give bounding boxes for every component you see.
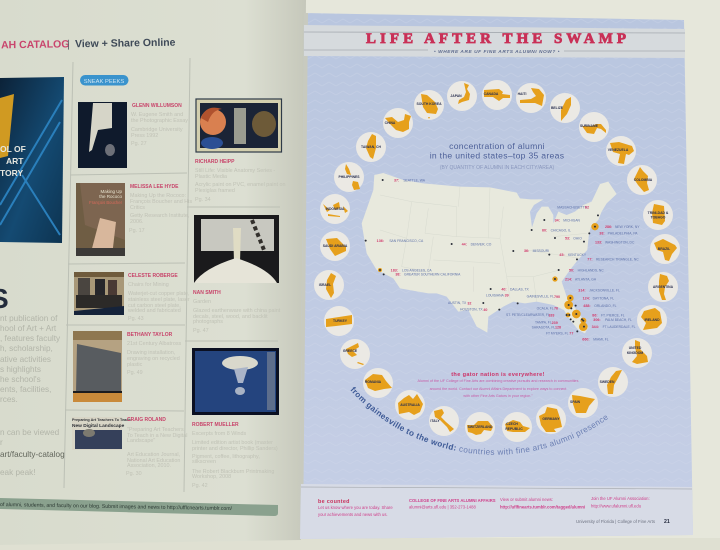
city labels: FT MYERS, FL bbox=[546, 332, 569, 336]
city labels: LOUISIANA bbox=[486, 293, 505, 297]
text: Melissa Lee Hyde: François Boucher and His bbox=[130, 199, 192, 205]
country: Belize: BELIZE bbox=[551, 106, 564, 110]
callout: gator nation: around the world. Contact our Alumni Affairs Department to explore ways to connect bbox=[430, 387, 566, 391]
city labels: 34: bbox=[555, 218, 560, 222]
city labels: MIAMI, FL bbox=[593, 338, 609, 342]
callout: gator nation bbox=[418, 372, 579, 398]
country: Saudi Arabia: SAUDI ARABIA bbox=[323, 244, 348, 248]
city labels bbox=[377, 178, 640, 342]
city labels: 38: bbox=[599, 232, 605, 236]
map heading: concentration of alumni bbox=[449, 141, 545, 151]
city labels: 314: bbox=[578, 289, 586, 293]
city labels: MICHIGAN bbox=[563, 218, 581, 222]
map heading: in the united states–top 35 areas bbox=[430, 150, 564, 160]
city labels: 62 bbox=[585, 206, 589, 210]
text: Glenn Willumson: the Photographic Essay bbox=[131, 118, 188, 124]
text: Bethany Taylor bbox=[127, 332, 182, 376]
country: Canada bbox=[482, 80, 512, 110]
text: Craig Roland: Landscape" bbox=[127, 438, 155, 444]
city labels: SEATTLE, WA bbox=[403, 178, 426, 182]
city labels: 38: bbox=[395, 273, 401, 277]
text: Celeste Roberge: Chairs for Mining bbox=[128, 282, 169, 288]
city markers bbox=[365, 179, 599, 332]
image: book cover: ART bbox=[6, 156, 24, 166]
country: Ireland bbox=[637, 305, 667, 335]
callout: gator nation: the gator nation is everywhere! bbox=[451, 372, 545, 378]
country: Switzerland bbox=[465, 412, 495, 442]
country: South Korea bbox=[414, 90, 444, 120]
city labels: MASSACHUSETTS bbox=[557, 205, 588, 209]
text: Bethany Taylor: 21st Century Albatross bbox=[127, 341, 182, 347]
city labels: SAN FRANCISCO, CA bbox=[389, 239, 424, 243]
city labels: NEW YORK, NY bbox=[615, 225, 640, 229]
text: Bethany Taylor: engraving on recycled bbox=[127, 356, 180, 362]
text: Richard Heipp: Plexiglas framed bbox=[195, 188, 235, 194]
city labels: DAYTONA, FL bbox=[593, 296, 614, 300]
country: Australia: AUSTRALIA bbox=[400, 403, 420, 407]
country: Israel bbox=[314, 270, 344, 300]
city labels: 239 bbox=[552, 321, 558, 325]
text: Celeste Roberge bbox=[127, 273, 190, 322]
country: Italy bbox=[429, 406, 459, 436]
city labels: 344: bbox=[592, 325, 599, 329]
text: Richard Heipp: RICHARD HEIPP bbox=[195, 159, 235, 165]
city labels: OHIO bbox=[573, 236, 582, 240]
country: Brazil bbox=[650, 234, 680, 264]
image: Rococo book: the Rococo bbox=[99, 194, 122, 199]
city labels: HIGHLANDS, NC bbox=[578, 268, 604, 272]
country: Philippines bbox=[334, 162, 364, 192]
image: book cover: TORY bbox=[0, 168, 23, 178]
country: South Korea: SOUTH KOREA bbox=[416, 102, 442, 106]
country: Israel: ISRAEL bbox=[319, 283, 331, 287]
text: catalog description: , features faculty bbox=[0, 334, 61, 343]
country: Greece bbox=[340, 339, 370, 369]
banner: blog callout bbox=[0, 498, 278, 516]
country: China: CHINA bbox=[385, 121, 396, 125]
city labels: HOUSTON, TX bbox=[460, 308, 483, 312]
country: Suriname: SURINAME bbox=[580, 124, 599, 128]
city labels: 306: bbox=[593, 318, 601, 322]
text: Robert Mueller: ROBERT MUELLER bbox=[192, 422, 239, 428]
country: Haiti: HAITI bbox=[518, 92, 526, 96]
text: catalog description: ents, facilities, bbox=[0, 385, 51, 394]
country: Turkey: TURKEY bbox=[333, 319, 348, 323]
grid lines bbox=[64, 58, 280, 492]
text: Glenn Willumson: Press 1992 bbox=[131, 133, 158, 139]
curved caption: countries with presence: from gainesville to the world: countries with fine arts alumni presence bbox=[350, 387, 608, 455]
image: Heipp painting bbox=[196, 99, 282, 152]
text: catalog description: rces. bbox=[0, 395, 18, 404]
text: Melissa Lee Hyde: MELISSA LEE HYDE bbox=[130, 184, 179, 190]
city labels: 77 bbox=[569, 332, 573, 336]
country: Germany: GERMANY bbox=[542, 417, 560, 421]
image: Roland article: New Digital Landscape bbox=[72, 423, 125, 429]
country: Haiti bbox=[516, 83, 546, 113]
country: Canada: CANADA bbox=[484, 92, 499, 96]
country: Turkey bbox=[324, 306, 354, 336]
text: Celeste Roberge: stainless steel plate, laser bbox=[128, 297, 190, 303]
text: page credit: University of Florida | College of Fine Arts bbox=[576, 519, 655, 524]
text: Bethany Taylor: Pg. 49 bbox=[127, 370, 143, 376]
city labels: FT. PIERCE, FL bbox=[601, 313, 625, 317]
city labels: 214: bbox=[565, 278, 572, 282]
text: alumni news: View or submit alumni news: bbox=[500, 497, 553, 502]
image: Rococo book: François Boucher bbox=[89, 200, 123, 205]
image: Taylor installation bbox=[73, 331, 122, 402]
badge: sneak peeks bbox=[80, 75, 128, 86]
country: Belize bbox=[550, 93, 580, 123]
city labels: AUSTIN, TX bbox=[448, 301, 467, 305]
city labels: 32 bbox=[467, 301, 471, 305]
city labels: CHICAGO, IL bbox=[551, 228, 571, 232]
city labels: 124: bbox=[583, 296, 590, 300]
text: Craig Roland bbox=[126, 417, 187, 477]
text: Melissa Lee Hyde: Critics bbox=[130, 205, 145, 211]
text: catalog description: n can be viewed bbox=[0, 428, 60, 437]
country: Czech Republic: CZECH bbox=[506, 422, 518, 426]
city labels: 45: bbox=[559, 253, 565, 257]
text: Nan Smith: Garden bbox=[193, 299, 211, 305]
text: Craig Roland: "Preparing Art Teachers bbox=[127, 427, 184, 433]
country: China bbox=[383, 108, 413, 138]
heading: catalog header: View + Share Online bbox=[75, 37, 176, 50]
text: Celeste Roberge: CELESTE ROBERGE bbox=[128, 273, 178, 279]
image: Mueller print bbox=[192, 348, 279, 415]
text: Robert Mueller: Limited edition artist book (master bbox=[192, 440, 273, 446]
city labels: FT LAUDERDALE, FL bbox=[603, 325, 636, 329]
text: Melissa Lee Hyde: Pg. 17 bbox=[129, 228, 145, 234]
city labels: 40: bbox=[501, 287, 507, 291]
country: Czech Republic bbox=[502, 412, 532, 442]
country: Spain: SPAIN bbox=[570, 400, 581, 404]
heading: catalog header: AH CATALOG bbox=[1, 38, 70, 51]
country: Ireland: IRELAND bbox=[644, 318, 660, 322]
heading band bbox=[304, 25, 685, 58]
country: Indonesia: INDONESIA bbox=[326, 207, 345, 211]
text: Celeste Roberge: cut carbon steel plate, bbox=[128, 303, 181, 309]
text: Glenn Willumson: W. Eugene Smith and bbox=[131, 112, 183, 118]
image: Smith sculpture bbox=[194, 215, 279, 283]
country: Brazil: BRAZIL bbox=[658, 247, 670, 251]
text: Bethany Taylor: Drawing installation, bbox=[127, 350, 176, 356]
text: alumni news bbox=[500, 497, 585, 510]
image: Roberge gallery bbox=[74, 272, 124, 315]
text: Celeste Roberge: Waterjet-cut copper plate, bbox=[128, 291, 190, 297]
country: Suriname bbox=[579, 112, 609, 142]
city labels: GAINESVILLE, FL bbox=[527, 295, 554, 299]
city labels: JACKSONVILLE, FL bbox=[589, 289, 620, 293]
city labels: 286: bbox=[605, 225, 612, 229]
country: Venezuela: VENEZUELA bbox=[608, 148, 629, 152]
text: catalog description: ative activities bbox=[0, 355, 51, 364]
text: alumni association: Join the UF Alumni Association: bbox=[591, 496, 650, 501]
country: Sweden bbox=[598, 367, 628, 397]
city labels: 44: bbox=[462, 242, 467, 246]
map: united states bbox=[362, 173, 640, 342]
country: Trinidad and Tobago: TOBAGO bbox=[651, 216, 666, 220]
subtitle: • WHERE ARE UF FINE ARTS ALUMNI NOW? • bbox=[434, 49, 560, 55]
text: Robert Mueller: printer and director, Phillip Sanders) bbox=[192, 446, 278, 452]
text: Melissa Lee Hyde: Making Up the Rococo: bbox=[130, 193, 186, 199]
text: Nan Smith: Pg. 47 bbox=[193, 328, 209, 334]
country: Indonesia bbox=[320, 194, 350, 224]
text: Glenn Willumson bbox=[131, 103, 188, 147]
text: Glenn Willumson: GLENN WILLUMSON bbox=[132, 103, 182, 109]
text: Bethany Taylor: plastic bbox=[127, 362, 143, 368]
country: United Kingdom: KINGDOM bbox=[627, 351, 643, 355]
panel: left catalog page bbox=[0, 0, 306, 545]
text: Melissa Lee Hyde: 2006. bbox=[130, 219, 144, 225]
text: Craig Roland: Art Education Journal, bbox=[127, 452, 181, 458]
text: Melissa Lee Hyde: Getty Research Institute, bbox=[130, 213, 190, 219]
city labels: 660: bbox=[582, 338, 590, 342]
text: Celeste Roberge: Pg. 43 bbox=[128, 316, 144, 322]
text: catalog description: art/faculty-catalog bbox=[0, 450, 65, 459]
city labels: OCALA, FL bbox=[537, 307, 554, 311]
panel: right infographic page bbox=[300, 13, 693, 539]
city labels: LOS ANGELES, CA bbox=[402, 268, 432, 272]
country: Czech Republic: REPUBLIC bbox=[505, 427, 523, 431]
country: Trinidad and Tobago: TRINI-DAD & bbox=[648, 211, 669, 215]
text: alumni news: http://uflfinearts.tumblr.com/tagged/alumni bbox=[500, 504, 585, 510]
text: Robert Mueller: The Robert Blackburn Printmaking bbox=[192, 469, 274, 475]
text: catalog description: r bbox=[0, 438, 3, 447]
city labels: 133: bbox=[595, 240, 602, 244]
country: Taiwan: TAIWAN, CH bbox=[361, 145, 381, 149]
city labels: 60: bbox=[542, 228, 547, 232]
country: Spain bbox=[568, 388, 598, 418]
image: Roland article bbox=[72, 417, 131, 450]
country: Venezuela bbox=[606, 136, 636, 166]
heading: catalog header: | bbox=[67, 38, 70, 50]
text: Richard Heipp bbox=[195, 159, 286, 203]
text: be counted: be counted bbox=[318, 499, 350, 505]
text: catalog description: he school's bbox=[0, 375, 41, 384]
city labels: ATLANTA, GA bbox=[575, 278, 597, 282]
text: page credit: 21 bbox=[664, 519, 670, 525]
text: Nan Smith: Glazed earthenware with china paint bbox=[193, 308, 281, 314]
text: Craig Roland: To Teach in a New Digital bbox=[127, 433, 187, 439]
text: Richard Heipp: Plastic Media bbox=[195, 174, 227, 180]
country: United Kingdom: UNITED bbox=[629, 346, 642, 350]
text: Craig Roland: National Art Education bbox=[127, 458, 180, 464]
text: Glenn Willumson: Cambridge University bbox=[131, 127, 183, 133]
country: Japan: JAPAN bbox=[450, 94, 462, 98]
country: Romania bbox=[363, 368, 393, 398]
text: Robert Mueller bbox=[192, 422, 278, 489]
text: Celeste Roberge: welded and fabricated bbox=[127, 308, 181, 314]
image: Rococo book bbox=[76, 183, 125, 256]
text: Nan Smith: decals, steel, wood, and backlit bbox=[193, 314, 268, 320]
text: Craig Roland: Pg. 30 bbox=[126, 471, 142, 477]
text: Robert Mueller: Pg. 42 bbox=[192, 483, 208, 489]
text: Richard Heipp: Pg. 34 bbox=[195, 197, 211, 203]
city labels: 183: bbox=[391, 268, 398, 272]
city labels: 790 bbox=[554, 295, 560, 299]
country: Saudi Arabia bbox=[320, 231, 350, 261]
text: alumni association: http://www.ufalumni.ufl.edu bbox=[591, 504, 642, 508]
text: Robert Mueller: Workshop, 2008 bbox=[192, 474, 231, 480]
country: Trinidad and Tobago bbox=[643, 200, 673, 230]
city labels: PHILADELPHIA, PA bbox=[608, 232, 638, 236]
city labels: 53: bbox=[565, 236, 570, 240]
city labels: TAMPA, FL bbox=[535, 321, 552, 325]
city labels: KENTUCKY bbox=[568, 253, 587, 257]
badge: sneak peeks: SNEAK PEEKS bbox=[84, 79, 124, 85]
text: catalog description: hool of Art + Art bbox=[0, 324, 57, 333]
callout: gator nation: with other Fine Arts Gators in your region." bbox=[463, 394, 533, 398]
text: Nan Smith: photographs bbox=[193, 319, 223, 325]
text: catalog description: nt publication of bbox=[0, 314, 58, 323]
city labels: 40 bbox=[483, 308, 487, 312]
country: Philippines: PHILIPPINES bbox=[338, 175, 360, 179]
country: Germany bbox=[536, 404, 566, 434]
city labels: 136: bbox=[377, 239, 384, 243]
country: Colombia bbox=[627, 165, 657, 195]
text: Robert Mueller: Pigment, coffee, lithography, bbox=[192, 454, 260, 460]
callout: gator nation: Alumni of the UF College of Fine Arts are combining creative pursuits and research in communities bbox=[418, 379, 579, 383]
text: be counted: your achievements and news with us. bbox=[318, 512, 388, 517]
city labels: PALM BEACH, FL bbox=[605, 318, 632, 322]
city labels: 50: bbox=[569, 268, 574, 272]
heading: catalog header bbox=[1, 37, 176, 51]
image: Rococo book: Making Up bbox=[100, 189, 122, 194]
text: Craig Roland: CRAIG ROLAND bbox=[127, 417, 166, 423]
country: Sweden: SWEDEN bbox=[600, 380, 615, 384]
text: catalog description: s highlights bbox=[0, 365, 41, 374]
text: Robert Mueller: Excerpts from 8 Winds bbox=[192, 431, 247, 437]
city labels: 86: bbox=[592, 313, 598, 317]
country: Colombia: COLOMBIA bbox=[634, 178, 653, 182]
image: book cover: OL OF bbox=[0, 144, 26, 154]
text: Bethany Taylor: BETHANY TAYLOR bbox=[127, 332, 173, 338]
text: catalog description: h, scholarship, bbox=[0, 344, 53, 353]
city labels: DENVER, CO bbox=[471, 242, 492, 246]
city labels: DALLAS, TX bbox=[510, 287, 530, 291]
title: LIFE AFTER THE SWAMP bbox=[366, 31, 626, 47]
text: Melissa Lee Hyde bbox=[129, 184, 192, 234]
footer band bbox=[300, 484, 693, 539]
text: Richard Heipp: Acrylic paint on PVC, enamel paint on bbox=[195, 182, 286, 188]
city labels: 37: bbox=[394, 178, 399, 182]
image: Smith book bbox=[78, 102, 127, 168]
text: Nan Smith bbox=[193, 290, 281, 334]
city labels: 488: bbox=[583, 304, 591, 308]
city labels: 77: bbox=[587, 258, 593, 262]
country: Italy: ITALY bbox=[430, 419, 440, 423]
text: Robert Mueller: silkscreen bbox=[192, 459, 216, 465]
image: book cover bbox=[0, 77, 64, 243]
image: Roland article: Preparing Art Teachers To Teach bbox=[72, 418, 131, 422]
country: Switzerland: SWITZERLAND bbox=[468, 425, 493, 429]
text: catalog description: eak peak! bbox=[0, 468, 36, 477]
text: Glenn Willumson: Pg. 27 bbox=[131, 141, 147, 147]
city labels: RESEARCH TRIANGLE, NC bbox=[596, 258, 639, 262]
text: be counted: Let us know where you are today. Share bbox=[318, 505, 393, 510]
text: Richard Heipp: Still Life: Visible Anatomy Series - bbox=[195, 168, 275, 174]
text: alumni association bbox=[591, 496, 650, 508]
city labels: 36: bbox=[524, 249, 529, 253]
country: Australia bbox=[395, 390, 425, 420]
banner: blog callout: of alumni, students, and faculty on our blog. Submit images and news to http://ufflcnearts.tumblr.com/ bbox=[0, 502, 233, 512]
country: Argentina bbox=[648, 272, 678, 302]
city labels: 183 bbox=[548, 313, 554, 317]
text: alumni affairs bbox=[409, 498, 496, 510]
country: Japan bbox=[447, 81, 477, 111]
country: Greece: GREECE bbox=[343, 349, 358, 353]
city labels: MISSOURI bbox=[533, 249, 549, 253]
city labels: WASHINGTON, DC bbox=[605, 240, 635, 244]
map heading bbox=[430, 141, 564, 171]
city labels: 128 bbox=[555, 326, 561, 330]
city labels: 76 bbox=[554, 307, 558, 311]
city labels: SARASOTA, FL bbox=[532, 325, 555, 329]
country: Romania: ROMANIA bbox=[365, 380, 382, 384]
city labels: 39 bbox=[505, 294, 509, 298]
text: alumni affairs: alumni@arts.ufl.edu | 352-273-1488 bbox=[409, 504, 476, 510]
city labels: GREATER SOUTHERN CALIFORNIA bbox=[404, 273, 461, 277]
country: United Kingdom bbox=[622, 338, 652, 368]
text: Craig Roland: Association, 2010. bbox=[127, 463, 171, 469]
city labels: ST. PETE/CLEARWATER, FL bbox=[506, 313, 550, 317]
text: catalog description bbox=[0, 314, 65, 477]
text: be counted bbox=[318, 499, 393, 517]
text: alumni affairs: COLLEGE OF FINE ARTS ALUMNI AFFAIRS bbox=[409, 498, 496, 503]
country: Taiwan bbox=[356, 132, 386, 162]
country: Argentina: ARGENTINA bbox=[653, 285, 674, 289]
map heading: (BY QUANTITY OF ALUMNI IN EACH CITY/AREA) bbox=[440, 165, 554, 171]
text: Nan Smith: NAN SMITH bbox=[193, 290, 221, 296]
city labels: ORLANDO, FL bbox=[594, 304, 617, 308]
